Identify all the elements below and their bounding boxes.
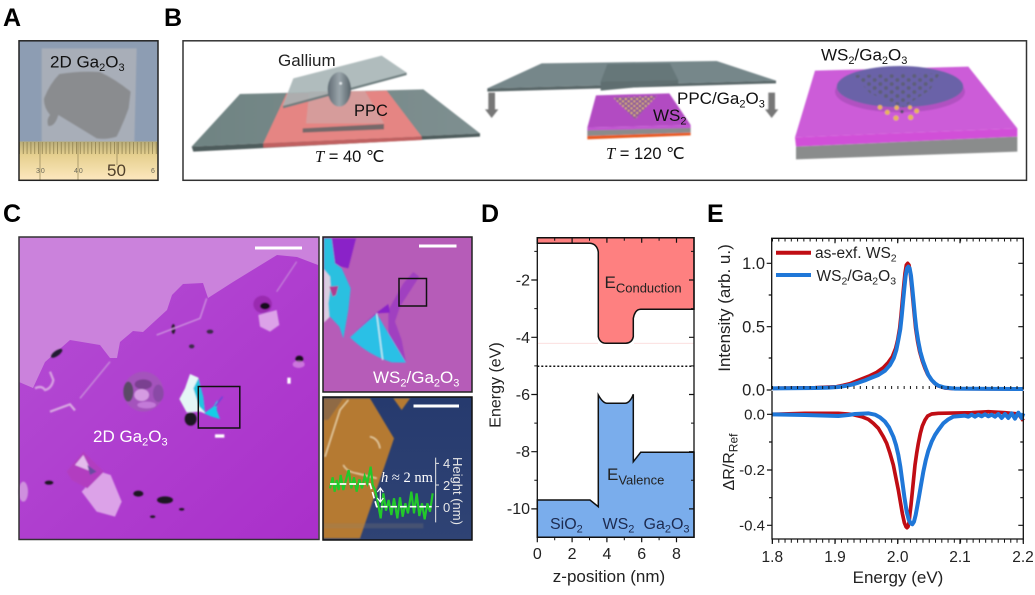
y tick labels: 0.0 <box>742 382 765 400</box>
curve: as-exfoliated WS2 <box>772 263 1023 389</box>
valence band region <box>537 394 694 537</box>
x tick labels: 2.1 <box>949 549 971 566</box>
label: temperature 40 C: T = 40 ℃ <box>315 147 384 166</box>
label: WS2/Ga2O3: O <box>440 368 453 387</box>
label: PPC/Ga2O3: PPC/Ga <box>677 89 739 108</box>
curve: as-exfoliated WS2 <box>772 412 1023 528</box>
curve: WS2/Ga2O3 <box>772 413 1023 524</box>
panel A: photo of 2D Ga2O3 on a ruler: 6 <box>151 168 155 175</box>
label: 2D Ga2O3: O <box>148 427 162 446</box>
x axis title: z-position (nm) <box>553 567 665 586</box>
panel A: photo of 2D Ga2O3 on a ruler <box>19 41 158 180</box>
label: WS2/Ga2O3: /Ga <box>855 46 882 64</box>
label: Ga2O3: 2 <box>665 524 671 536</box>
step 1: gallium squeezed between slides <box>192 51 480 166</box>
label: Gallium: Gallium <box>278 51 336 70</box>
panel A: photo of 2D Ga2O3 on a ruler: 40 <box>74 168 84 175</box>
height scale numbers: 2 <box>443 478 450 493</box>
step 2: stamping onto WS2 at 120 C <box>485 61 778 163</box>
panel E bottom: differential reflectance chart <box>721 391 1034 587</box>
label: PPC/Ga2O3: 2 <box>739 98 745 110</box>
y tick labels: -10 <box>507 501 530 518</box>
scale bar <box>414 404 459 408</box>
x tick labels: 4 <box>602 546 611 563</box>
x tick labels: 8 <box>672 546 681 563</box>
label: PPC/Ga2O3: O <box>745 89 759 108</box>
sample label: 2 <box>99 62 105 74</box>
panel C top inset: WS2/Ga2O3 micrograph <box>323 237 472 392</box>
panel A: photo of 2D Ga2O3 on a ruler: 30 <box>36 168 46 175</box>
x tick labels: 6 <box>637 546 646 563</box>
label: 2D Ga2O3: 2 <box>142 436 148 448</box>
label: WS2/Ga2O3: /Ga <box>407 368 434 387</box>
label: WS2/Ga2O3: WS <box>373 368 400 387</box>
y tick labels: -4 <box>516 330 530 347</box>
panel C bottom inset: AFM height map <box>323 397 472 540</box>
label: Ga2O3: 3 <box>683 524 690 536</box>
legend: 2 <box>841 276 847 288</box>
x tick labels <box>533 546 681 563</box>
label: WS2/Ga2O3: 2 <box>882 55 888 67</box>
label: Ga2O3: Ga <box>644 516 665 533</box>
y tick labels: -2 <box>516 272 530 290</box>
label: SiO2: SiO <box>550 516 577 533</box>
label: Ga2O3: O <box>671 516 683 533</box>
label: PPC: PPC <box>354 102 388 120</box>
step 3: WS2/Ga2O3 result <box>795 46 1017 159</box>
label: SiO2: 2 <box>577 524 583 536</box>
y tick labels <box>739 406 765 534</box>
y tick labels: 0.0 <box>744 406 765 424</box>
label: WS2/Ga2O3: 2 <box>848 55 855 67</box>
legend <box>776 245 897 288</box>
label: E valence: E <box>607 465 618 484</box>
height scale numbers: 0 <box>443 500 450 515</box>
y tick labels: -0.2 <box>739 462 765 479</box>
y axis title: ΔR/R <box>721 452 738 490</box>
legend: 3 <box>890 276 896 288</box>
axes frame and ticks <box>531 238 694 542</box>
panel B: transfer schematic frame <box>183 41 1026 180</box>
legend: 2 <box>872 276 878 288</box>
y axis title: Ref <box>726 433 740 452</box>
height scale numbers <box>443 456 450 515</box>
label: WS2: WS <box>602 516 628 533</box>
label: WS2: WS <box>653 106 680 125</box>
legend: /Ga <box>847 268 873 285</box>
label: WS2: 2 <box>628 524 634 536</box>
inset marker square <box>399 278 426 306</box>
panel A: photo of 2D Ga2O3 on a ruler: 50 <box>107 161 126 180</box>
x tick labels: 1.9 <box>824 549 846 566</box>
legend: as-exf. WS <box>815 245 891 262</box>
height scale numbers: 4 <box>443 456 450 471</box>
x tick labels: 1.8 <box>762 549 783 566</box>
x tick labels: 2.0 <box>887 549 909 566</box>
y tick labels: -0.4 <box>739 518 765 534</box>
sample label: 3 <box>118 62 125 74</box>
height profile trace <box>330 458 439 522</box>
label: E valence: Valence <box>618 472 664 488</box>
inset marker square <box>198 386 240 428</box>
label: h approx 2 nm: h ≈ 2 nm <box>381 470 434 486</box>
label: WS2/Ga2O3: WS <box>821 46 848 64</box>
legend: WS <box>816 268 841 285</box>
panel label C: C <box>3 200 21 228</box>
y tick labels: -6 <box>516 387 530 404</box>
panel C main: optical micrograph of 2D Ga2O3 <box>19 237 319 540</box>
Fermi level dotted line <box>537 365 694 367</box>
y axis title: Energy (eV) <box>488 342 504 428</box>
panel label B: B <box>164 4 182 32</box>
panel label A: A <box>3 4 21 32</box>
label: WS2/Ga2O3: O <box>888 46 901 64</box>
scale bar <box>255 246 302 250</box>
legend: O <box>878 268 890 285</box>
y tick labels: 0.5 <box>742 318 765 336</box>
label: E conduction: E <box>604 273 616 292</box>
y axis title: Intensity (arb. u.) <box>715 244 734 372</box>
label: WS2/Ga2O3: 2 <box>400 378 407 390</box>
x tick labels: 2 <box>568 546 577 563</box>
y tick labels: -8 <box>516 444 530 461</box>
sample label: 2D Ga <box>50 52 99 72</box>
y tick labels <box>742 255 765 400</box>
x tick labels: 0 <box>533 546 542 563</box>
panel D: band diagram <box>488 238 694 586</box>
axes frame and ticks <box>767 391 1023 544</box>
sample label: O <box>105 52 118 72</box>
conduction band region <box>537 238 694 343</box>
label: 2D Ga2O3: 3 <box>162 436 168 448</box>
panel E top: reflectance/PL intensity chart <box>715 238 1023 400</box>
label: WS2/Ga2O3: 3 <box>453 378 459 390</box>
height axis title: Height (nm) <box>450 457 465 525</box>
panel label E: E <box>707 200 724 228</box>
axes frame and ticks <box>767 238 1023 390</box>
y tick labels <box>507 272 530 518</box>
label: E conduction: Conduction <box>616 280 682 296</box>
x tick labels: 2.2 <box>1012 549 1034 566</box>
curve: WS2/Ga2O3 <box>772 267 1023 389</box>
label: WS2: 2 <box>680 116 687 128</box>
label: PPC/Ga2O3: 3 <box>759 98 765 110</box>
x tick labels <box>762 549 1034 566</box>
scale bar <box>419 244 456 248</box>
panel label D: D <box>481 200 499 228</box>
label: WS2/Ga2O3: 3 <box>901 55 907 67</box>
legend: 2 <box>891 252 897 264</box>
label: temperature 120 C: T = 120 ℃ <box>606 144 685 163</box>
label: 2D Ga2O3: 2D Ga <box>93 427 142 446</box>
label: WS2/Ga2O3: 2 <box>434 378 440 390</box>
x axis title: Energy (eV) <box>853 568 943 587</box>
y tick labels: 1.0 <box>742 255 765 273</box>
